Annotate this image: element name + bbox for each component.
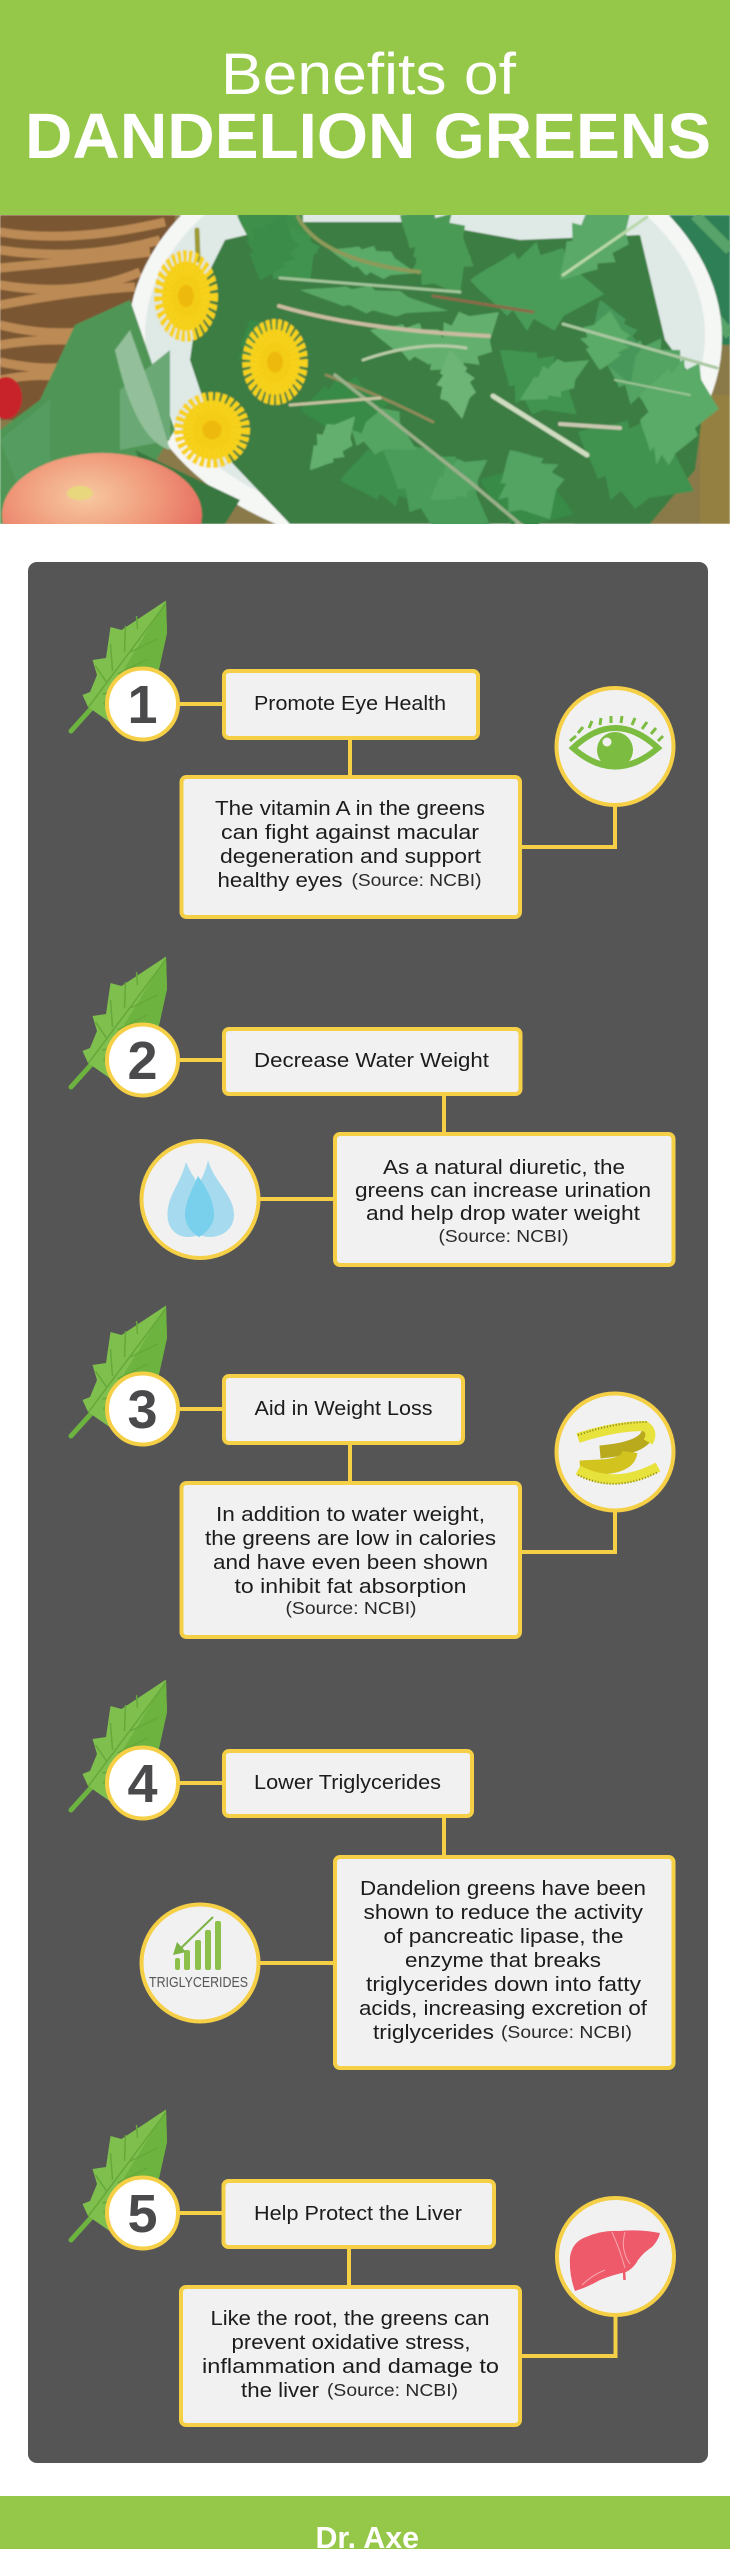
body box 4 (335, 1857, 674, 2068)
connectors 2 (178, 1060, 444, 1199)
number badge 3: 3 (127, 1380, 158, 1440)
body box 2: As a natural diuretic, the (383, 1156, 625, 1179)
leaf badge 3 (71, 1306, 167, 1436)
body box 1: can fight against macular (221, 821, 479, 844)
leaf badge 4 (71, 1680, 167, 1810)
title box 1: Promote Eye Health (254, 692, 446, 715)
leaf badge 2 (71, 956, 167, 1087)
body box 3: to inhibit fat absorption (234, 1575, 466, 1598)
connectors 4 (178, 1783, 444, 1963)
body box 5: prevent oxidative stress, (232, 2331, 470, 2354)
connectors 1 (178, 704, 615, 847)
body box 4: (Source: NCBI) (501, 2022, 632, 2042)
body box 3 (182, 1483, 520, 1637)
body box 3: and have even been shown (213, 1551, 488, 1574)
wood table (700, 395, 730, 524)
body box 4: enzyme that breaks (405, 1949, 601, 1972)
panel background (28, 562, 708, 2463)
icon: triglycerides chart (142, 1904, 258, 2022)
body box 1 (182, 777, 520, 917)
benefit 3: weight loss (71, 1306, 674, 1637)
body box 4: triglycerides (373, 2021, 494, 2044)
panel: benefits list (28, 562, 708, 2463)
white bowl (130, 215, 724, 524)
body box 5 (181, 2287, 520, 2425)
green stalks (669, 215, 730, 346)
title box 3: Aid in Weight Loss (254, 1397, 432, 1420)
title box 2: Decrease Water Weight (254, 1049, 489, 1072)
body box 3: In addition to water weight, (216, 1503, 485, 1526)
title box 1 (224, 671, 478, 738)
title box 3 (224, 1376, 463, 1443)
red fruit (0, 377, 22, 419)
benefit 2: water weight (71, 956, 674, 1265)
number badge 5 (107, 2178, 178, 2248)
body box 4: Dandelion greens have been (360, 1877, 646, 1900)
icon: triglycerides chart: TRIGLYCERIDES (149, 1974, 248, 1991)
photo: bowl of dandelion greens (0, 215, 730, 524)
icon: liver (557, 2198, 674, 2315)
number badge 2 (107, 1024, 178, 1096)
header banner (0, 0, 730, 215)
body box 5: Like the root, the greens can (210, 2307, 490, 2330)
body box 4: shown to reduce the activity (364, 1901, 644, 1924)
title box 4: Lower Triglycerides (254, 1771, 441, 1794)
body box 2: and help drop water weight (366, 1202, 640, 1225)
connectors 3 (178, 1409, 615, 1552)
leaf badge 1 (71, 600, 167, 731)
wicker basket (0, 215, 175, 420)
body box 3: (Source: NCBI) (286, 1598, 416, 1618)
title box 5: Help Protect the Liver (254, 2202, 462, 2225)
body box 1: healthy eyes (218, 869, 342, 892)
number badge 1 (107, 668, 178, 740)
title line: Benefits of: Benefits of (221, 42, 517, 107)
number badge 4: 4 (127, 1754, 158, 1814)
title box 4 (224, 1751, 472, 1816)
body box 4: triglycerides down into fatty (366, 1973, 642, 1996)
benefit 1: eye health (71, 600, 674, 917)
body box 1: (Source: NCBI) (352, 870, 482, 890)
body box 3: the greens are low in calories (205, 1527, 496, 1550)
number badge 4 (107, 1748, 178, 1818)
apple (0, 452, 204, 524)
body box 1: The vitamin A in the greens (215, 797, 485, 820)
footer banner (0, 2496, 730, 2549)
icon: measuring tape (556, 1394, 674, 1510)
stems (197, 217, 717, 524)
body box 4: acids, increasing excretion of (359, 1997, 647, 2020)
number badge 3 (107, 1374, 178, 1444)
body box 5: (Source: NCBI) (327, 2380, 458, 2400)
side greens (0, 300, 240, 524)
number badge 1: 1 (127, 675, 158, 735)
body box 2: (Source: NCBI) (438, 1226, 568, 1246)
body box 2: greens can increase urination (355, 1179, 651, 1202)
benefit 4: triglycerides (71, 1680, 674, 2068)
title line: Dandelion Greens: DANDELION GREENS (25, 100, 711, 172)
leaf badge 5 (71, 2110, 167, 2240)
body box 4: of pancreatic lipase, the (384, 1925, 624, 1948)
title box 5 (224, 2181, 494, 2247)
body box 5: the liver (241, 2379, 319, 2402)
number badge 5: 5 (127, 2184, 158, 2244)
benefit 5: liver (71, 2110, 674, 2425)
body box 2 (335, 1134, 674, 1265)
body box 5: inflammation and damage to (202, 2355, 499, 2378)
body box 1: degeneration and support (220, 845, 481, 868)
leaf mass (189, 215, 719, 524)
title box 2 (224, 1029, 520, 1094)
icon: water drops (142, 1141, 258, 1258)
dandelion flowers (162, 261, 300, 459)
connectors 5 (178, 2213, 616, 2356)
icon: eye (556, 688, 674, 805)
number badge 2: 2 (127, 1031, 158, 1091)
